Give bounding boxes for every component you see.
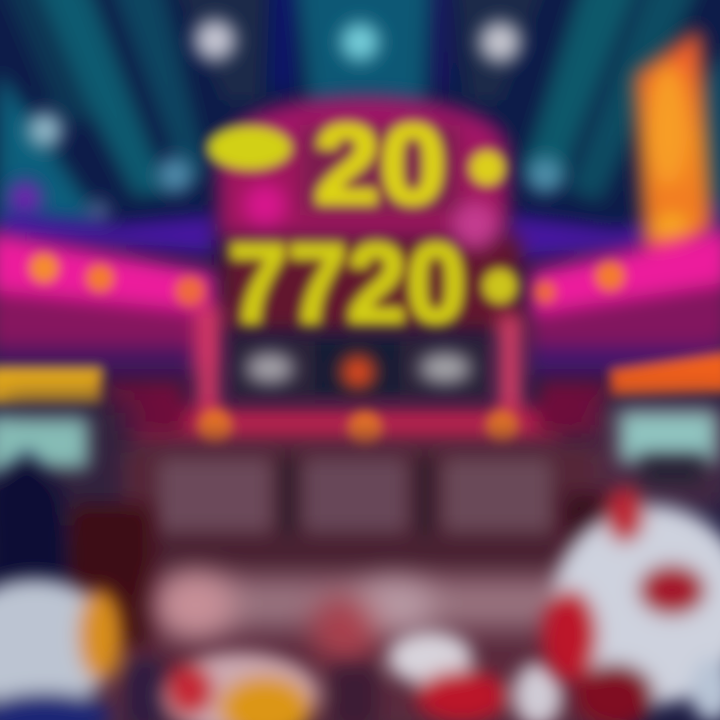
stage lights	[8, 20, 563, 224]
foreground: center balloons	[155, 573, 435, 664]
dark display panel	[234, 340, 486, 396]
marquee left wing	[0, 232, 215, 375]
lower base fill	[0, 400, 720, 720]
columns	[196, 305, 522, 425]
background: night sky with teal rays	[0, 0, 720, 240]
figure: right dark silhouettes	[565, 455, 705, 565]
figure: left dark silhouettes	[0, 450, 152, 645]
side sign: left yellow	[0, 368, 102, 404]
foreground: right checkered figure	[542, 487, 720, 720]
lower marquee lights	[130, 408, 560, 445]
marquee right wing	[530, 228, 720, 375]
windows over base	[0, 412, 716, 468]
heading: 20 sign: 20	[314, 102, 446, 227]
orange vertical banner	[635, 28, 712, 278]
crowd band	[130, 450, 590, 628]
heading: 20 sign	[208, 102, 505, 227]
center sign backdrop	[218, 97, 522, 330]
side sign: right orange	[610, 352, 720, 396]
roof purple band	[0, 200, 720, 260]
heading: 7720 sign: 7720	[228, 221, 466, 346]
foreground: center bottom shapes	[162, 632, 562, 720]
foreground: left figure	[0, 579, 165, 720]
windows	[0, 380, 716, 476]
